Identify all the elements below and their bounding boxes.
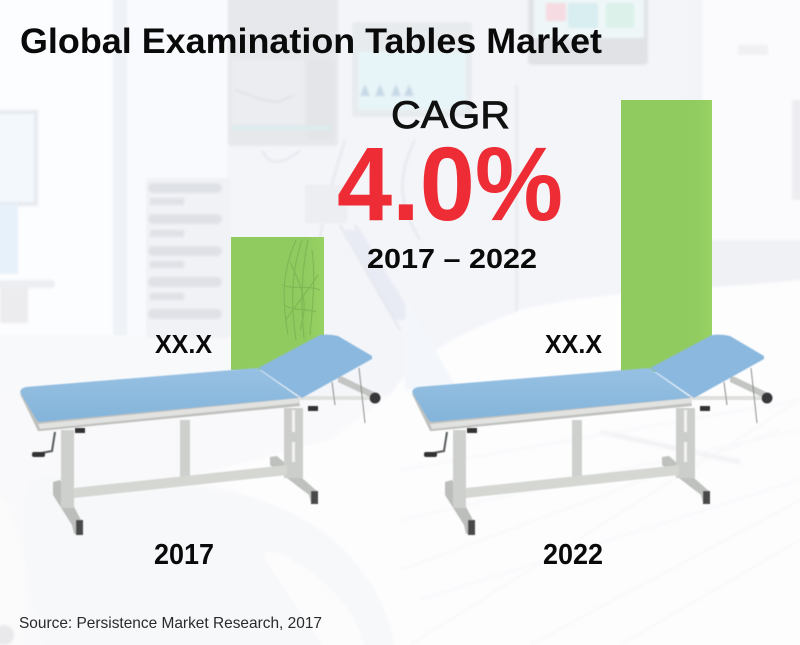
value label 2017: XX.X bbox=[155, 329, 213, 359]
mattress bbox=[412, 368, 690, 422]
left wall and window bbox=[0, 0, 113, 340]
CAGR value: 4.0% bbox=[337, 126, 563, 243]
mattress bbox=[20, 368, 298, 422]
CAGR period: 2017 – 2022 bbox=[367, 243, 537, 274]
bar: 2017 bbox=[231, 237, 324, 370]
headrest bbox=[258, 335, 372, 398]
bar: 2022 bbox=[621, 100, 712, 372]
year label 2022: 2022 bbox=[543, 539, 603, 571]
rear legs bbox=[180, 420, 190, 477]
headrest bbox=[650, 335, 764, 398]
crank handle bbox=[36, 432, 55, 454]
brackets bbox=[75, 428, 85, 433]
IV pole bbox=[515, 85, 518, 325]
headrest support arm bbox=[730, 376, 768, 399]
window right bbox=[700, 0, 800, 240]
examination table 2017 bbox=[20, 335, 380, 535]
knob bbox=[370, 392, 380, 404]
front leg bbox=[453, 430, 466, 508]
value label 2022: XX.X bbox=[545, 329, 603, 359]
device rack bbox=[146, 178, 231, 338]
cables bbox=[262, 140, 420, 330]
front foot bbox=[53, 480, 82, 534]
headrest support arm bbox=[338, 376, 376, 399]
knob bbox=[762, 392, 772, 404]
front foot bbox=[445, 480, 474, 534]
year label 2017: 2017 bbox=[154, 539, 214, 571]
frame bbox=[20, 394, 300, 431]
icon: cable bundle seen through bar bbox=[282, 240, 320, 340]
front leg bbox=[61, 430, 74, 508]
title: Global Examination Tables Market bbox=[20, 22, 602, 61]
source note: Source: Persistence Market Research, 2017 bbox=[19, 615, 322, 632]
brackets bbox=[467, 428, 477, 433]
foot rear bbox=[662, 456, 710, 503]
bed blanket bbox=[0, 395, 395, 645]
foot rear bbox=[270, 456, 318, 503]
crank handle bbox=[428, 432, 447, 454]
examination table 2022 bbox=[412, 335, 772, 535]
rear legs bbox=[572, 420, 582, 477]
monitors bbox=[228, 0, 338, 146]
crossbar bbox=[466, 465, 679, 498]
crossbar bbox=[74, 465, 287, 498]
CAGR label: CAGR bbox=[391, 94, 510, 137]
frame bbox=[412, 394, 692, 431]
